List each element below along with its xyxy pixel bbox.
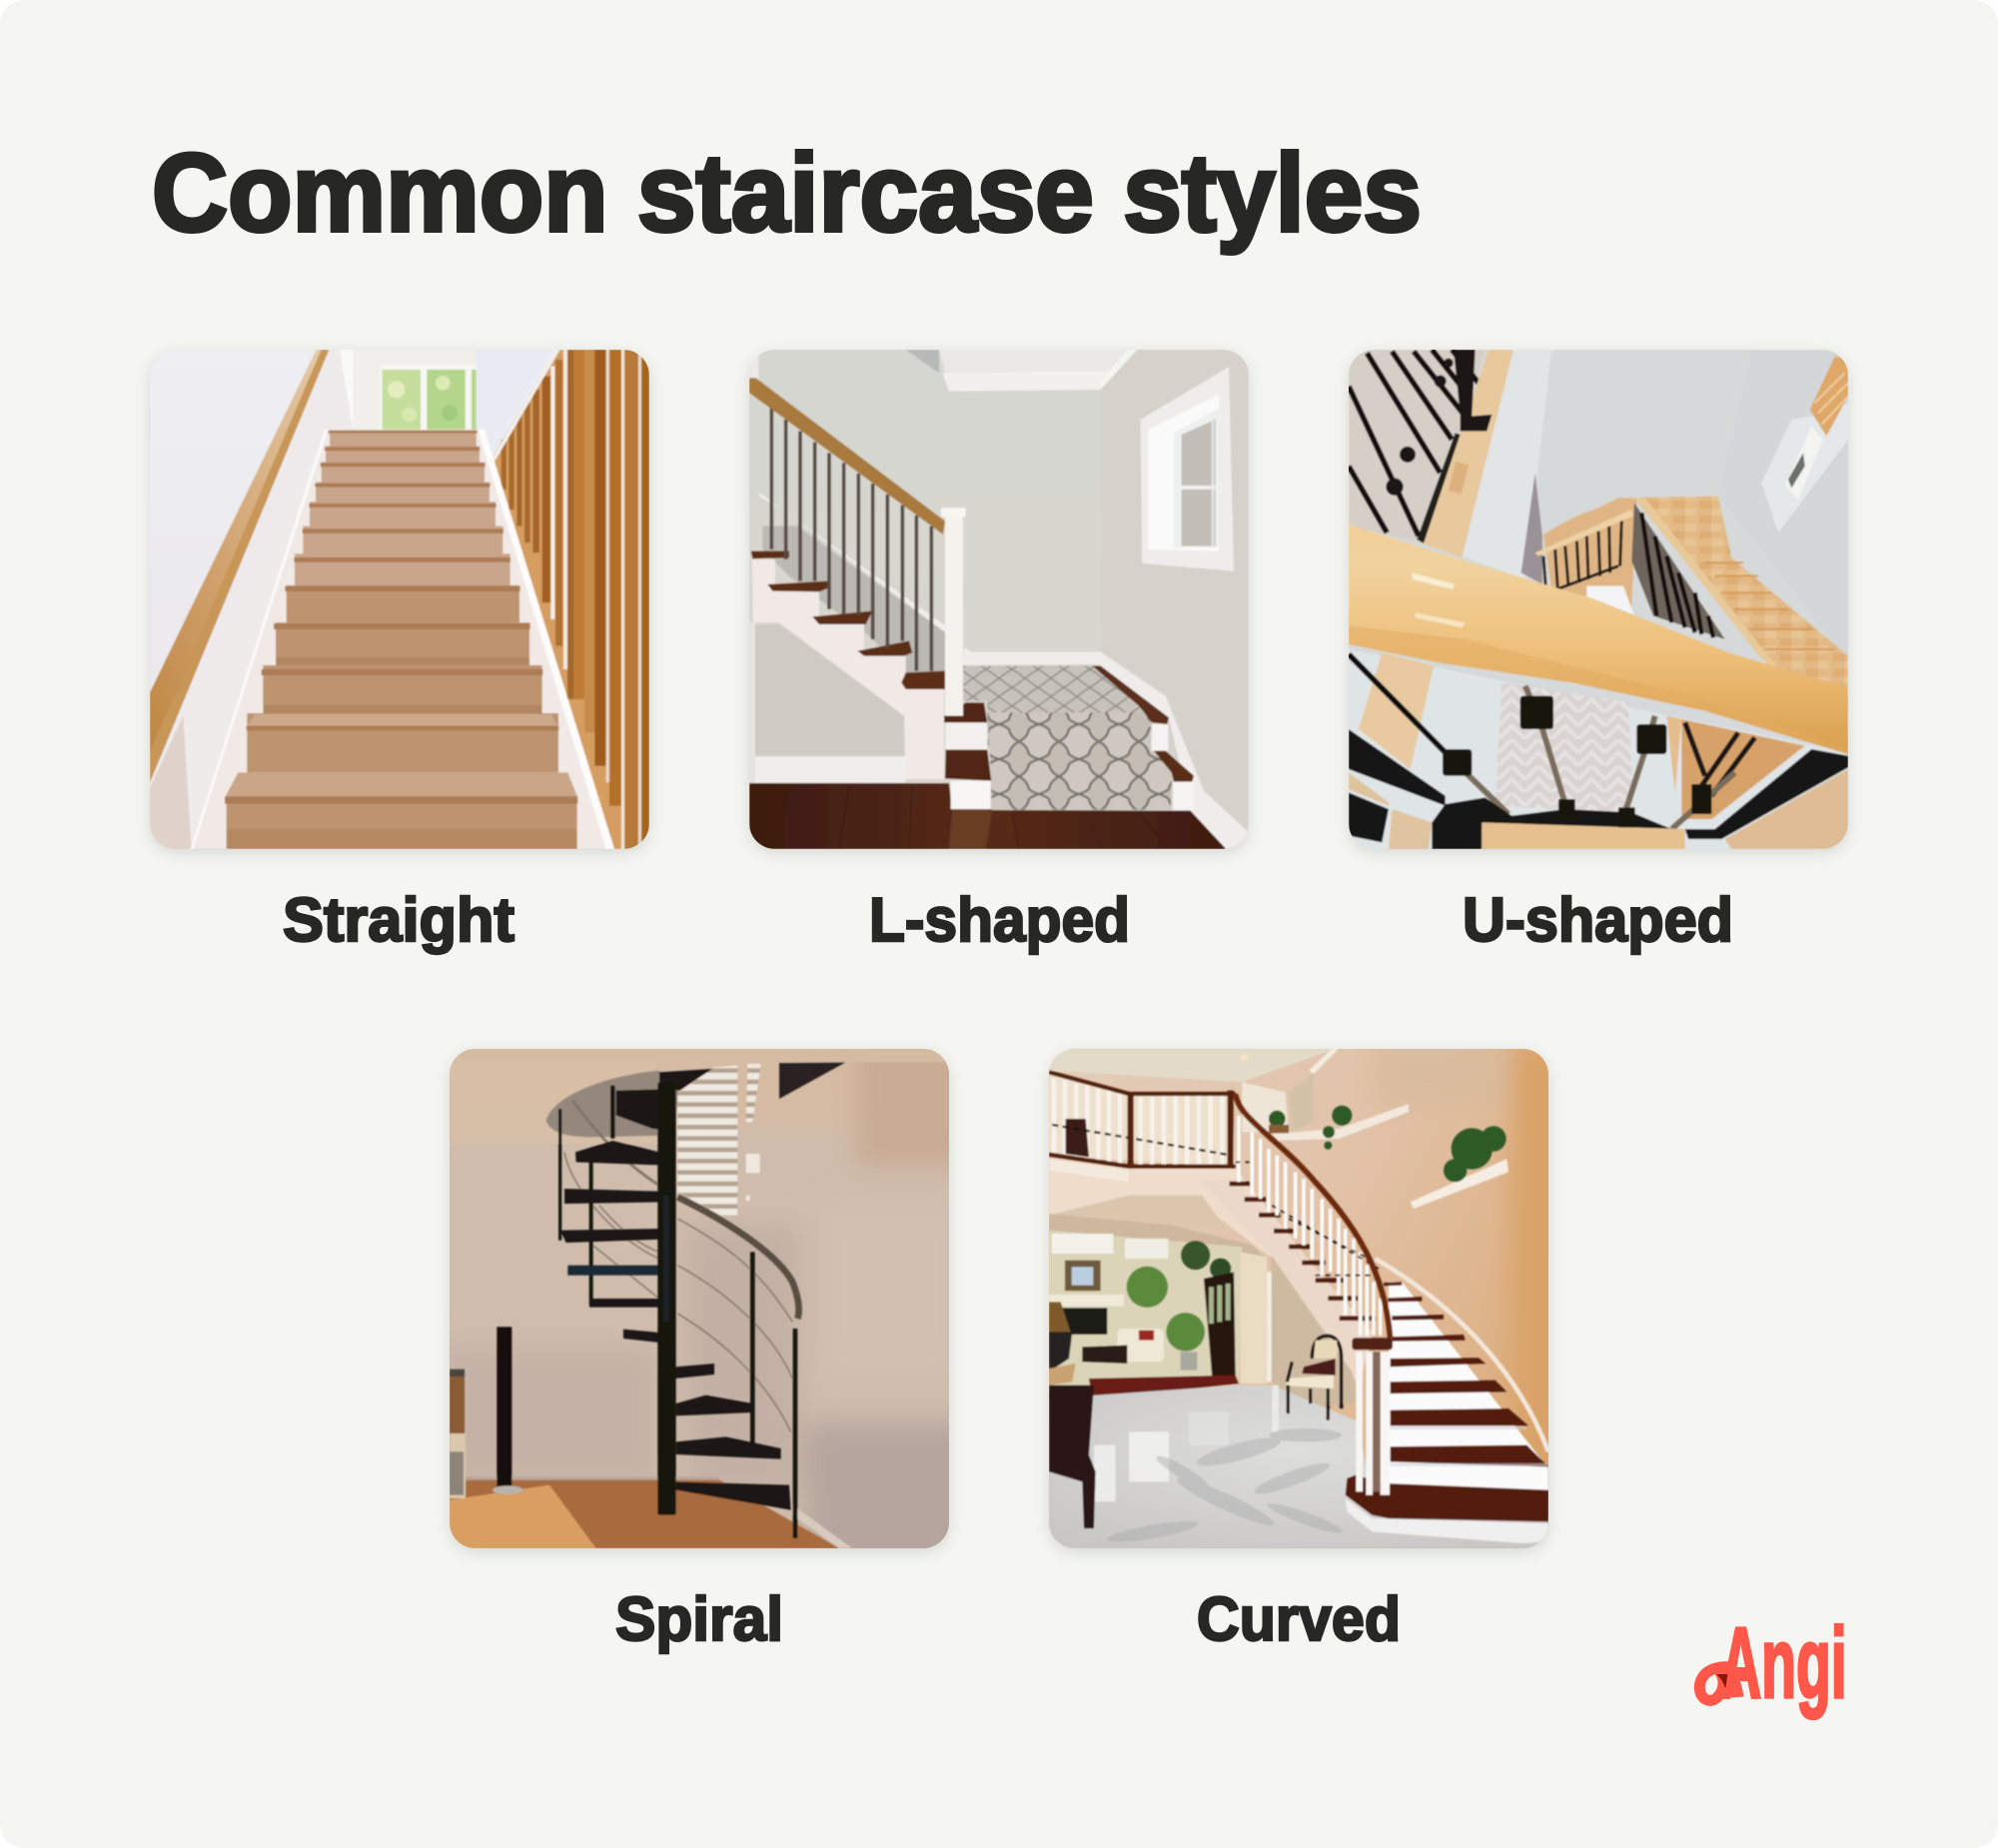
lower zone <box>1349 649 1848 849</box>
white stringer <box>752 559 944 779</box>
logo: Angi <box>1699 1607 1847 1719</box>
photo: spiral staircase <box>450 1049 949 1548</box>
left wall and handrail <box>154 356 353 773</box>
photo shadow <box>1349 354 1848 853</box>
window <box>1141 367 1234 571</box>
shelf <box>450 1376 466 1434</box>
label: Spiral: Spiral <box>615 1585 783 1654</box>
rails <box>564 1101 792 1431</box>
label: Straight: Straight <box>283 886 514 955</box>
black beams <box>1349 729 1446 806</box>
photo shadow <box>450 1053 949 1552</box>
brackets <box>1443 696 1711 827</box>
big handrail <box>1349 524 1848 754</box>
photo shadow <box>1049 1053 1548 1552</box>
logo: Angi: Angi <box>1720 1607 1847 1719</box>
label: U-shaped: U-shaped <box>1463 886 1733 955</box>
balcony background <box>1049 1074 1236 1167</box>
marble floor <box>1049 1386 1548 1548</box>
panel: straight staircase <box>150 350 649 853</box>
carpeted upper flight <box>762 526 946 672</box>
ceiling <box>1049 1049 1336 1082</box>
title: Common staircase styles <box>152 132 1422 255</box>
shutter light <box>677 1066 737 1216</box>
panel: curved staircase <box>1049 1039 1571 1552</box>
stair wall skirting <box>1376 1259 1548 1451</box>
balcony rail <box>1049 1072 1236 1167</box>
upper left railing <box>1349 350 1486 542</box>
far flight <box>1619 496 1848 692</box>
column and under-stair wall <box>1241 1252 1267 1384</box>
photo: L-shaped staircase <box>749 350 1249 849</box>
panel: L-shaped staircase <box>749 350 1249 853</box>
floor <box>749 783 1226 849</box>
skirting <box>963 647 1249 849</box>
stairs <box>1389 1282 1548 1521</box>
floor <box>450 1480 839 1548</box>
treads <box>751 551 955 689</box>
stairwell opening <box>546 1071 679 1137</box>
photo shadow <box>150 354 649 853</box>
small treads <box>1230 1182 1376 1321</box>
carpet <box>963 666 1152 747</box>
panel: spiral staircase <box>440 1039 972 1571</box>
chair <box>1286 1336 1342 1420</box>
frame verticals <box>560 1086 795 1538</box>
label: Curved: Curved <box>1197 1585 1401 1654</box>
curved handrail <box>1236 1094 1391 1339</box>
centre pole <box>657 1082 676 1515</box>
handrail <box>749 378 945 534</box>
photo shadow <box>749 354 1249 853</box>
newel post <box>945 516 963 716</box>
newel cluster <box>1356 1352 1390 1495</box>
photo: curved staircase <box>1049 1039 1571 1548</box>
window <box>1761 403 1848 532</box>
panel: U-shaped staircase <box>1349 350 1848 853</box>
stairs <box>295 431 510 585</box>
furniture left <box>1049 1386 1096 1528</box>
balusters <box>1239 1116 1381 1336</box>
photo: U-shaped staircase <box>1349 350 1848 849</box>
grey sliver <box>1521 472 1542 584</box>
right banister <box>493 350 622 849</box>
treads <box>560 1069 791 1510</box>
photo: straight staircase <box>150 350 649 849</box>
spindles <box>771 408 931 671</box>
niches and plants <box>1272 1104 1409 1141</box>
underside <box>1049 1159 1372 1386</box>
speaker <box>497 1327 511 1486</box>
living room <box>1049 1231 1242 1391</box>
metal rails <box>1349 654 1735 829</box>
label: L-shaped: L-shaped <box>869 886 1130 955</box>
under stair wall <box>754 624 904 756</box>
